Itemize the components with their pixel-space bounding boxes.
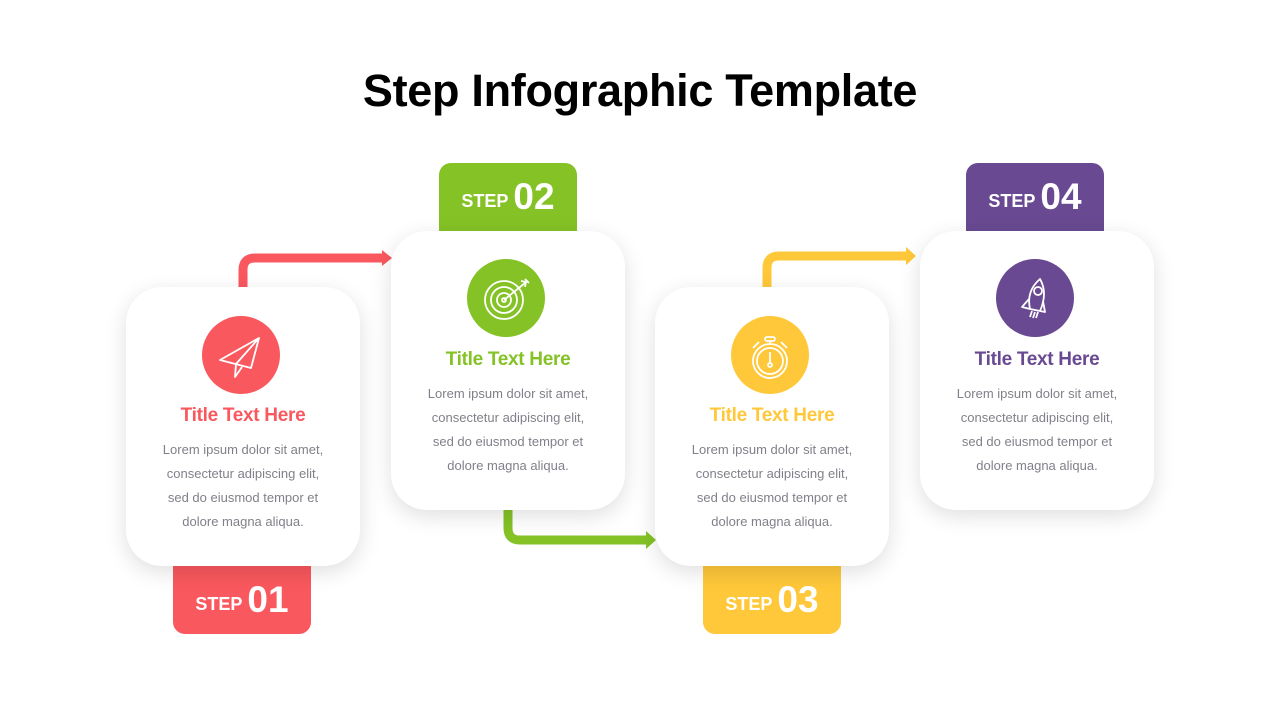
icon: stopwatch [731,316,809,394]
icon: paper plane [202,316,280,394]
tab: step 03 [703,566,841,634]
tab: step 04: 04 [1040,176,1082,217]
title text: Title Text Here [181,405,305,426]
body text: dolore magna aliqua. [447,458,569,473]
body text: sed do eiusmod tempor et [168,490,318,505]
body text: dolore magna aliqua. [182,514,304,529]
body text [163,442,323,529]
tab: step 03: 03 [777,579,819,620]
title: Step Infographic Template [363,65,917,116]
body text: consectetur adipiscing elit, [167,466,319,481]
tab: step 01: STEP [195,594,242,614]
body text: Lorem ipsum dolor sit amet, [692,442,852,457]
icon: rocket [996,259,1074,337]
title text: Title Text Here [710,405,834,426]
tab: step 01 [173,566,311,634]
body text: consectetur adipiscing elit, [961,410,1113,425]
body text: Lorem ipsum dolor sit amet, [957,386,1117,401]
tab: step 02: 02 [513,176,555,217]
body text: dolore magna aliqua. [711,514,833,529]
arrow: step1 to step2 [243,250,392,292]
body text [428,386,588,473]
body text: dolore magna aliqua. [976,458,1098,473]
tab: step 03: STEP [725,594,772,614]
arrow: step2 to step3 [508,505,656,549]
panel: step 1 [126,287,360,566]
panel: step 4 [920,231,1154,510]
tab: step 02: STEP [461,191,508,211]
body text [957,386,1117,473]
panel: step 3 [655,287,889,566]
title text: Title Text Here [446,349,570,370]
body text: sed do eiusmod tempor et [962,434,1112,449]
tab: step 04 [966,163,1104,231]
body text: Lorem ipsum dolor sit amet, [428,386,588,401]
body text [692,442,852,529]
tab: step 04: STEP [988,191,1035,211]
body text: Lorem ipsum dolor sit amet, [163,442,323,457]
body text: consectetur adipiscing elit, [432,410,584,425]
body text: sed do eiusmod tempor et [433,434,583,449]
icon: target [467,259,545,337]
panel: step 2 [391,231,625,510]
title text: Title Text Here [975,349,1099,370]
arrow: step3 to step4 [767,247,916,292]
body text: sed do eiusmod tempor et [697,490,847,505]
tab: step 01: 01 [247,579,289,620]
body text: consectetur adipiscing elit, [696,466,848,481]
tab: step 02 [439,163,577,231]
